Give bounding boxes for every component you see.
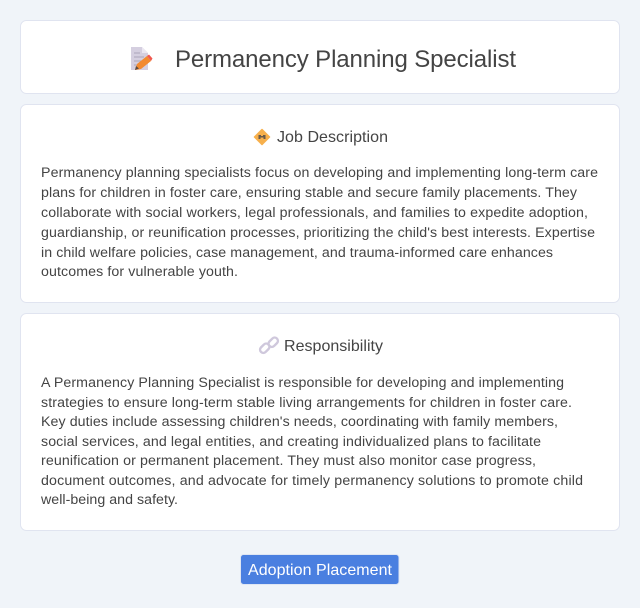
text block: responsibility: [40, 375, 583, 508]
panel: responsibility: [20, 314, 620, 530]
text block: job description: Permanency planning specialists focus on developing and implementing long-term care: [41, 165, 598, 181]
text block: responsibility: document outcomes, and advocate for timely permanency solutions to promote child: [41, 473, 583, 489]
panel: job description: [20, 104, 620, 302]
text block: responsibility: strategies to ensure long-term stable living arrangements for children in foster care.: [41, 395, 572, 411]
button: adoption placement: Adoption Placement: [248, 562, 393, 579]
text block: job description: in child welfare policies, case management, and trauma-informed care enhances: [41, 245, 553, 261]
heading: job description: Job Description: [277, 129, 388, 146]
text block: job description: [41, 165, 598, 280]
icon: road sign: [254, 130, 270, 144]
title: Permanency Planning Specialist: [175, 46, 516, 73]
text block: job description: guardianship, or reunification processes, prioritizing the child's best interests. Expertise: [41, 225, 595, 241]
button: adoption placement: [240, 554, 399, 584]
text block: job description: collaborate with social workers, legal professionals, and families to expedite adoption,: [41, 205, 588, 221]
text block: responsibility: Key duties include assessing children's needs, coordinating with family members,: [41, 414, 558, 430]
text block: responsibility: social services, and legal entities, and creating individualized plans to facilitate: [41, 434, 541, 450]
text block: responsibility: A Permanency Planning Specialist is responsible for developing and implementing: [41, 375, 564, 391]
text block: responsibility: well-being and safety.: [40, 492, 178, 508]
icon: chain link: [259, 336, 279, 354]
text block: job description: outcomes for vulnerable youth.: [41, 264, 238, 280]
text block: responsibility: reunification or permanent placement. They must also monitor case progress,: [41, 453, 536, 469]
panel: title card: [20, 20, 620, 94]
icon: document with pencil: [131, 47, 152, 70]
text block: job description: plans for children in foster care, ensuring stable and secure family placements. They: [41, 185, 578, 201]
heading: responsibility: Responsibility: [284, 338, 383, 355]
